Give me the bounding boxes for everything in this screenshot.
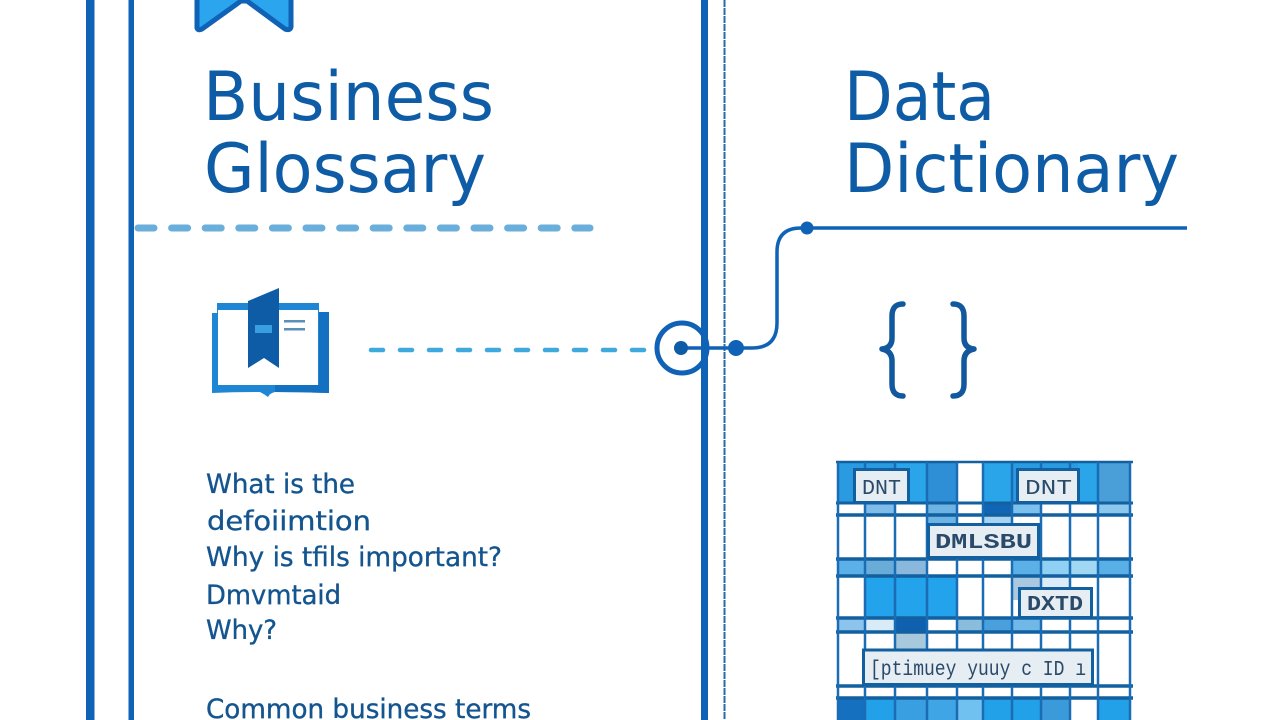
heading: Business Glossary: Glossary	[204, 130, 486, 209]
panel: centre dashed rail	[724, 0, 726, 720]
heading: Data Dictionary	[844, 58, 1179, 209]
text block: glossary questions: defoiimtion	[207, 506, 371, 537]
row 2 cells	[865, 503, 1130, 515]
heading: Data Dictionary: Dictionary	[844, 130, 1179, 209]
row 3 top strips	[927, 515, 1012, 523]
row 4 cells	[838, 559, 1130, 576]
text block: glossary questions: Why?	[206, 615, 277, 646]
heading: Data Dictionary: Data	[844, 58, 995, 137]
table label: DNT right	[1018, 470, 1078, 502]
table label: DXTD	[1020, 588, 1092, 618]
table label: DMLSBU	[928, 524, 1038, 558]
panel: left outer rail	[86, 0, 94, 720]
row 9 cells	[838, 698, 1130, 720]
connector: node to data dictionary	[657, 222, 1187, 373]
dashed divider: glossary	[138, 224, 590, 232]
grid lines	[836, 462, 1133, 720]
icon: bookmark top	[197, 0, 291, 30]
table label: primary key ID	[864, 650, 1092, 684]
text block: glossary questions: What is the	[206, 469, 355, 500]
panel: left inner rail	[128, 0, 134, 720]
row 1 cells	[838, 462, 1130, 503]
icon: open book with bookmark	[212, 288, 329, 397]
table label: DNT left: DNT	[862, 478, 901, 501]
table label: primary key ID: [ptimuey yuuy c ID ı	[870, 659, 1086, 682]
heading: Business Glossary	[203, 58, 494, 209]
row 5 cells	[865, 576, 1070, 618]
chart: data table grid	[836, 462, 1133, 720]
table label: DXTD: DXTD	[1027, 594, 1083, 617]
icon: curly braces	[882, 304, 974, 396]
dashed connector: book to node	[371, 348, 645, 352]
table label: DMLSBU: DMLSBU	[935, 532, 1032, 555]
heading: Business Glossary: Business	[203, 58, 494, 137]
row 6 cells	[838, 618, 1041, 649]
text block: glossary questions	[206, 469, 531, 720]
table label: DNT left	[854, 470, 908, 502]
text block: glossary questions: Dmvmtaid	[206, 580, 341, 611]
panel: centre rail	[701, 0, 708, 720]
text block: glossary questions: Why is tfils important?	[206, 542, 502, 573]
table label: DNT right: DNT	[1025, 478, 1072, 501]
